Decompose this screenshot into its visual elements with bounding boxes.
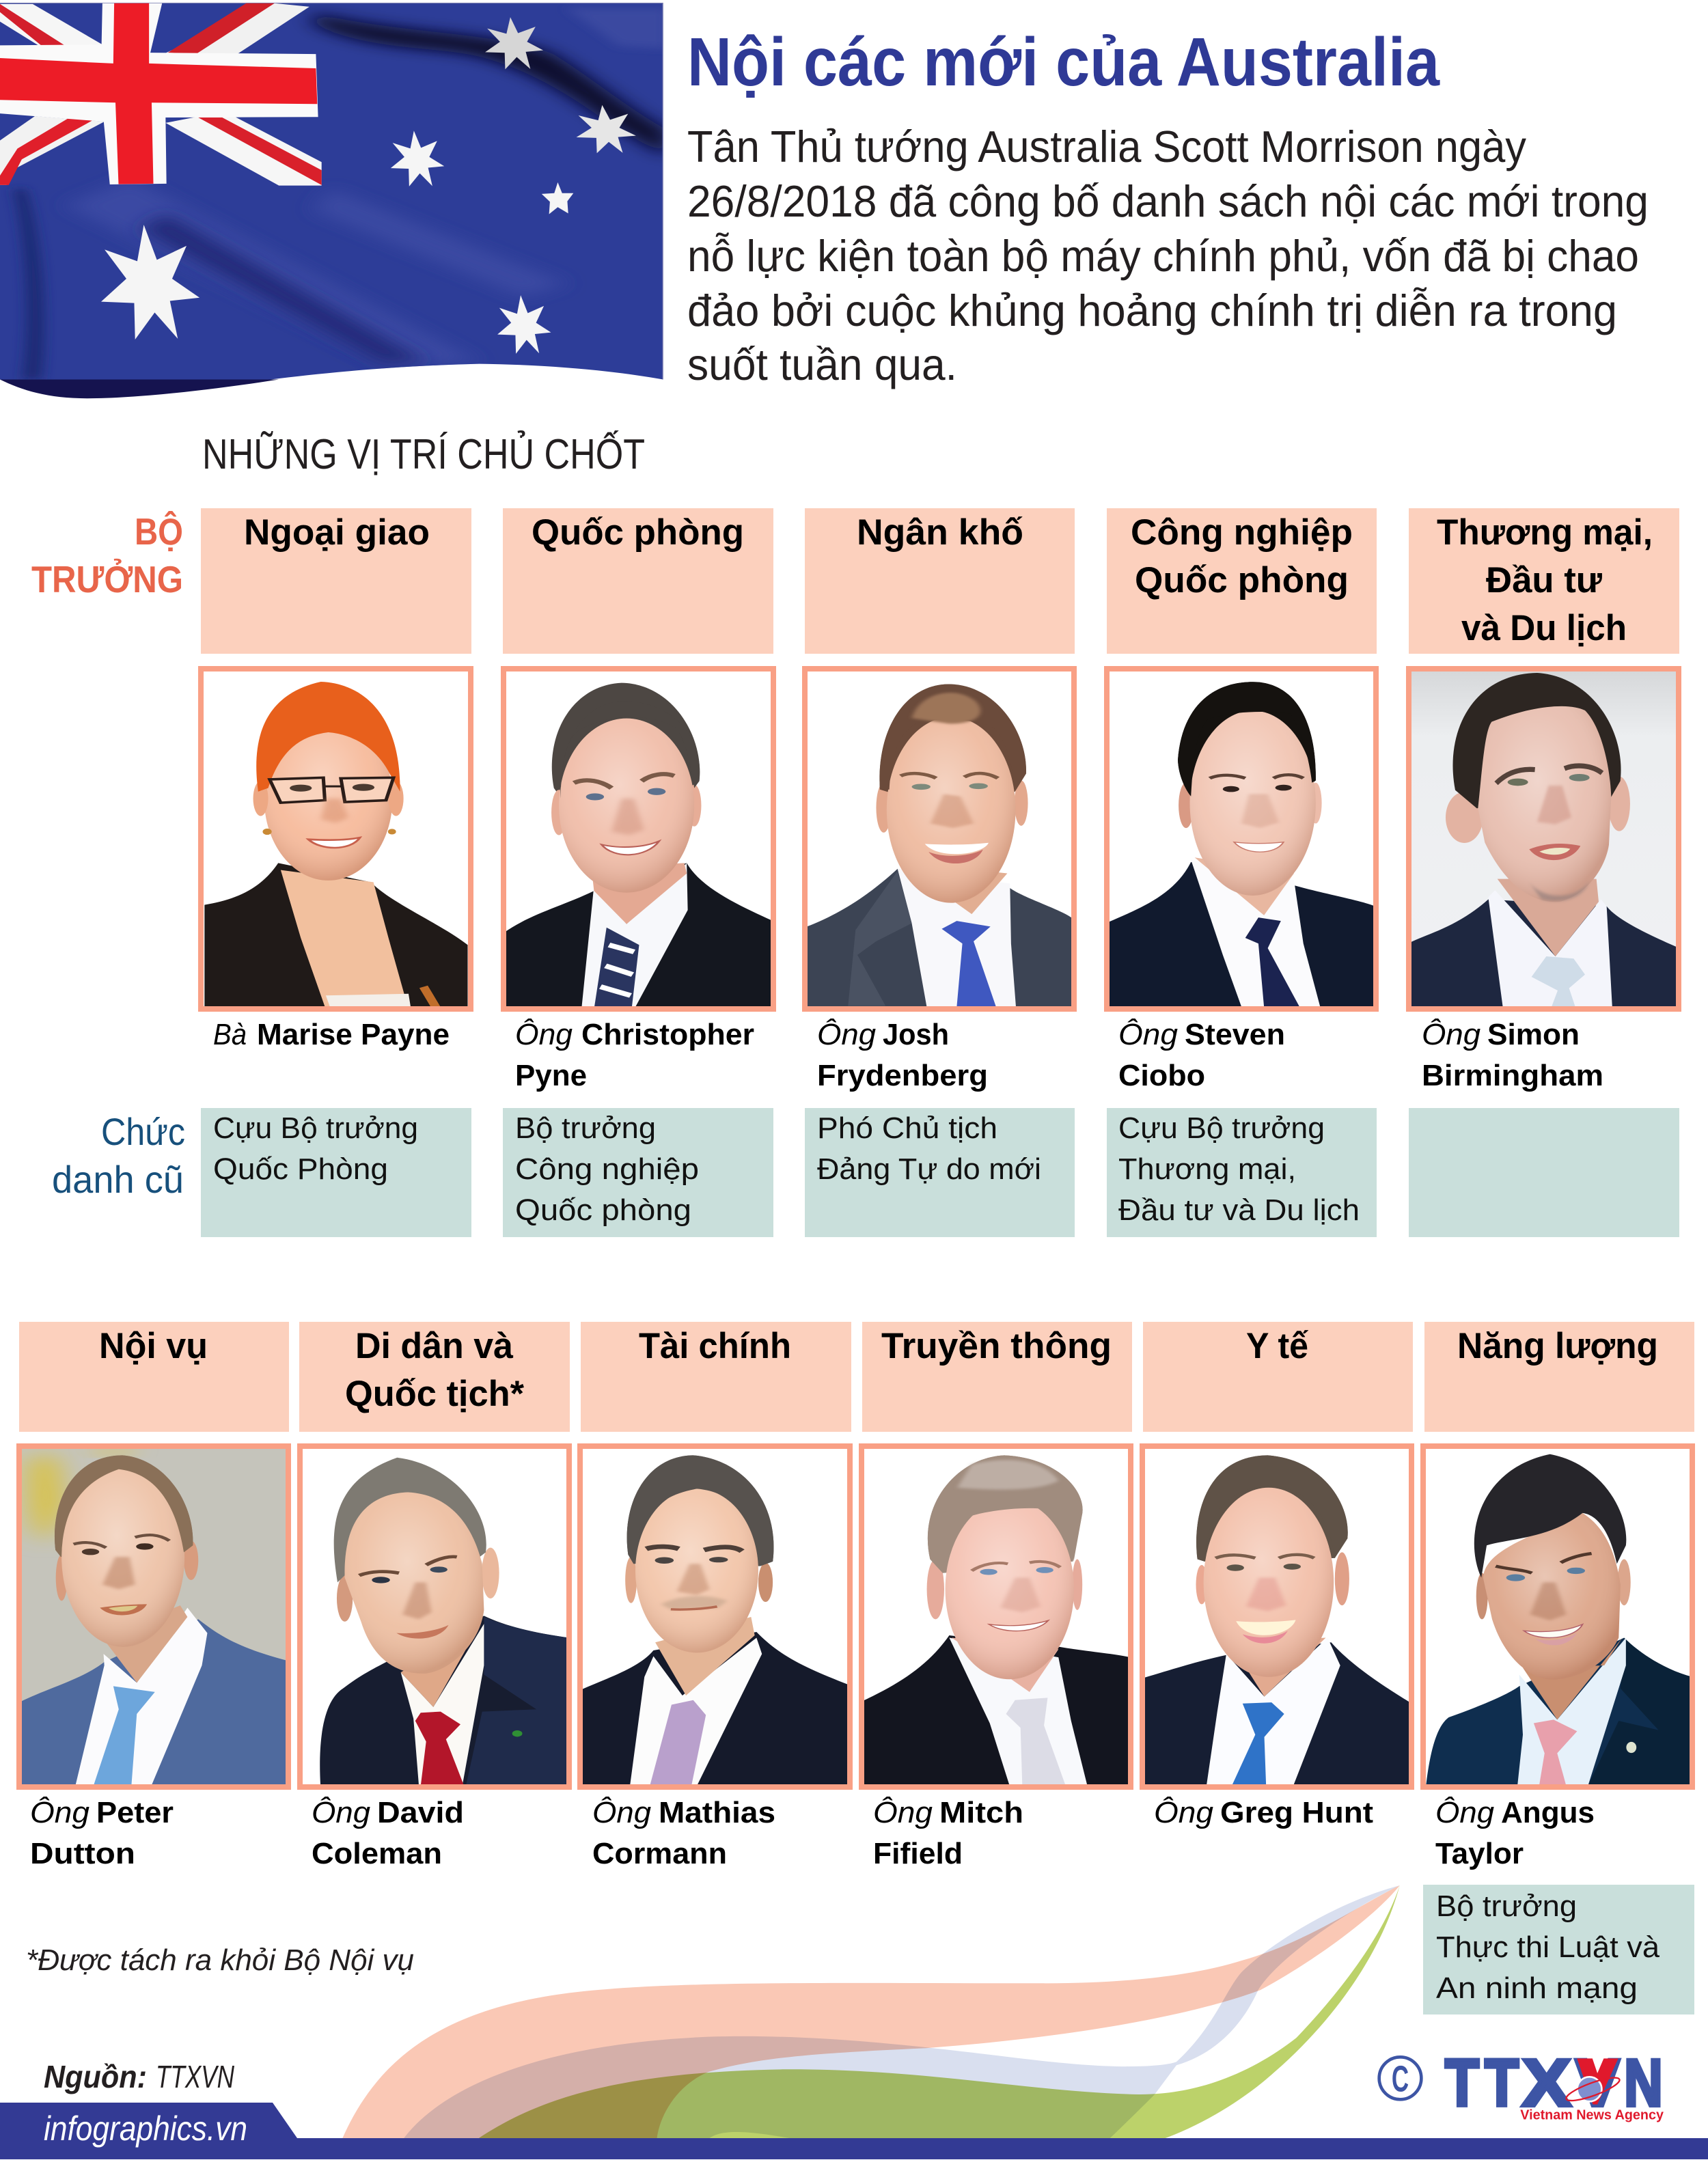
row label: Chức danh cũ: danh cũ <box>52 1158 184 1201</box>
name <box>312 1795 464 1870</box>
copyright mark: C <box>1392 2060 1409 2100</box>
heading <box>805 508 1075 654</box>
former position: Thương mại, <box>1118 1152 1296 1186</box>
former position: Bộ trưởng <box>1436 1889 1577 1923</box>
name: David <box>377 1796 464 1829</box>
name: Angus <box>1501 1796 1595 1829</box>
former position (empty) <box>1409 1108 1679 1237</box>
panel: Truyền thông <box>862 1322 1132 1870</box>
row label: Chức danh cũ: Chức <box>101 1110 185 1153</box>
wordmark: X <box>1522 2045 1571 2120</box>
heading <box>503 508 773 654</box>
frame <box>1423 1446 1692 1787</box>
logo: TTXVN <box>1379 2045 1664 2123</box>
frame <box>580 1446 850 1787</box>
row label: Bộ trưởng: BỘ <box>135 510 183 553</box>
panel: Nội vụ <box>19 1322 289 1870</box>
former position: Cựu Bộ trưởng <box>1118 1111 1325 1145</box>
name: Ông <box>312 1795 371 1829</box>
wordmark: T <box>1485 2045 1519 2120</box>
name: Ông <box>592 1795 652 1829</box>
heading: Công nghiệp <box>1131 512 1353 553</box>
name <box>817 1017 988 1092</box>
row label: Chức danh cũ <box>52 1110 185 1201</box>
decorative swooshes <box>342 1885 1400 2140</box>
name: Greg Hunt <box>1220 1796 1373 1829</box>
name: Coleman <box>312 1837 442 1870</box>
former position <box>1423 1885 1694 2014</box>
name: Josh <box>883 1018 949 1051</box>
frame <box>201 669 471 1009</box>
panel: Ngoại giao <box>201 508 471 1237</box>
heading <box>1424 1322 1694 1432</box>
heading <box>1107 508 1377 654</box>
frame <box>1107 669 1376 1009</box>
union jack <box>0 3 322 186</box>
name: Dutton <box>30 1837 135 1870</box>
name: Ông <box>1154 1795 1214 1829</box>
former position: Quốc phòng <box>515 1193 691 1227</box>
name <box>592 1795 775 1870</box>
name: Ông <box>1435 1795 1495 1829</box>
flag stars <box>101 17 636 354</box>
portrait: David Coleman <box>300 1446 569 1787</box>
panel: Di dân và Quốc tịch <box>299 1322 570 1870</box>
name <box>30 1795 174 1870</box>
heading: Ngân khố <box>857 512 1023 553</box>
name: Ông <box>1422 1017 1481 1051</box>
footer band <box>0 2103 1708 2159</box>
portrait: Marise Payne <box>201 669 471 1010</box>
former position: Đầu tư và Du lịch <box>1118 1193 1360 1227</box>
name <box>873 1795 1023 1870</box>
frame <box>504 669 773 1009</box>
section heading: NHỮNG VỊ TRÍ CHỦ CHỐT <box>202 431 645 478</box>
frame <box>300 1446 569 1787</box>
row label: Bộ trưởng <box>31 510 183 600</box>
name <box>1435 1795 1595 1870</box>
portrait: Steven Ciobo <box>1107 669 1376 1009</box>
name <box>1118 1017 1285 1092</box>
name <box>1154 1795 1373 1829</box>
footnote: *Được tách ra khỏi Bộ Nội vụ <box>26 1943 414 1977</box>
heading: Đầu tư <box>1486 560 1603 600</box>
former position: An ninh mạng <box>1436 1971 1638 2005</box>
wordmark: V <box>1575 2045 1620 2120</box>
flag of Australia <box>0 0 667 398</box>
row label: Bộ trưởng: TRƯỞNG <box>31 558 183 600</box>
panel: Công nghiệp Quốc phòng <box>1107 508 1377 1237</box>
name: Pyne <box>515 1059 587 1092</box>
panel: Quốc phòng <box>503 508 773 1237</box>
heading <box>1143 1322 1413 1432</box>
former position: Công nghiệp <box>515 1152 699 1186</box>
name: Christopher <box>581 1018 754 1051</box>
name: Fifield <box>873 1837 963 1870</box>
name: Marise Payne <box>257 1018 450 1051</box>
intro paragraph <box>687 122 1649 389</box>
heading <box>1409 508 1679 654</box>
name: Cormann <box>592 1837 727 1870</box>
name: Mathias <box>659 1796 775 1829</box>
frame <box>1142 1446 1411 1787</box>
former position <box>805 1108 1075 1237</box>
heading <box>19 1322 289 1432</box>
former position: Quốc Phòng <box>213 1152 388 1186</box>
red V and globe <box>1564 2058 1622 2105</box>
name <box>515 1017 754 1092</box>
heading: Quốc tịch* <box>345 1374 524 1414</box>
name: Peter <box>96 1796 174 1829</box>
heading: Thương mại, <box>1437 512 1653 553</box>
wordmark: N <box>1624 2045 1663 2120</box>
heading: Truyền thông <box>881 1326 1112 1366</box>
heading <box>299 1322 570 1432</box>
name: Taylor <box>1435 1837 1524 1870</box>
panel: Tài chính <box>580 1322 851 1870</box>
frame <box>862 1446 1131 1787</box>
portrait: Christopher Pyne <box>504 669 773 1010</box>
wordmark: T <box>1445 2045 1479 2120</box>
agency name: Vietnam News Agency <box>1520 2108 1664 2123</box>
former position: Bộ trưởng <box>515 1111 656 1145</box>
source credit <box>44 2059 235 2094</box>
heading: Quốc phòng <box>1135 560 1349 600</box>
source credit: TTXVN <box>156 2059 235 2094</box>
panel: Ngân khố <box>805 508 1075 1237</box>
name: Frydenberg <box>817 1059 988 1092</box>
intro paragraph: 26/8/2018 đã công bố danh sách nội các mới trong <box>687 176 1649 226</box>
wordmark <box>1445 2045 1663 2120</box>
name: Ciobo <box>1118 1059 1205 1092</box>
portrait: Angus Taylor <box>1423 1446 1692 1787</box>
portrait: Simon Birmingham <box>1409 669 1679 1009</box>
heading: Ngoại giao <box>244 512 430 553</box>
portrait: Peter Dutton <box>19 1446 288 1787</box>
former position <box>201 1108 471 1237</box>
former position: Đảng Tự do mới <box>817 1152 1041 1186</box>
panel: Thương mại, Đầu tư và Du lịch <box>1409 508 1679 1237</box>
former position: Cựu Bộ trưởng <box>213 1111 418 1145</box>
name: Mitch <box>939 1796 1023 1829</box>
name: Ông <box>873 1795 933 1829</box>
heading: Y tế <box>1246 1326 1308 1366</box>
name: Steven <box>1185 1018 1285 1051</box>
heading: và Du lịch <box>1461 608 1627 648</box>
heading: Tài chính <box>639 1326 791 1366</box>
former position: Phó Chủ tịch <box>817 1111 997 1145</box>
intro paragraph: suốt tuần qua. <box>687 340 957 389</box>
name: Birmingham <box>1422 1059 1603 1092</box>
heading: Năng lượng <box>1457 1326 1658 1366</box>
intro paragraph: đảo bởi cuộc khủng hoảng chính trị diễn ra trong <box>687 286 1617 335</box>
portrait: Mathias Cormann <box>580 1446 850 1787</box>
title: Nội các mới của Australia <box>687 24 1440 100</box>
name: Simon <box>1487 1018 1580 1051</box>
frame <box>805 669 1074 1009</box>
former position <box>503 1108 773 1237</box>
frame <box>19 1446 288 1787</box>
heading: Nội vụ <box>99 1326 208 1366</box>
name: Ông <box>817 1017 877 1051</box>
heading <box>862 1322 1132 1432</box>
panel: Y tế <box>1142 1322 1413 1829</box>
intro paragraph: Tân Thủ tướng Australia Scott Morrison ngày <box>687 122 1526 171</box>
heading: Quốc phòng <box>532 512 744 553</box>
copyright mark <box>1379 2057 1421 2100</box>
intro paragraph: nỗ lực kiện toàn bộ máy chính phủ, vốn đã bị chao <box>687 231 1639 281</box>
portrait: Josh Frydenberg <box>805 669 1074 1009</box>
former position <box>1107 1108 1377 1237</box>
former position: Thực thi Luật và <box>1436 1930 1660 1964</box>
portrait: Mitch Fifield <box>862 1446 1131 1787</box>
heading <box>581 1322 851 1432</box>
heading <box>201 508 471 654</box>
website label: infographics.vn <box>44 2109 247 2148</box>
name <box>1422 1017 1603 1092</box>
panel: Năng lượng <box>1423 1322 1694 2014</box>
frame <box>1409 669 1679 1009</box>
heading: Di dân và <box>355 1326 514 1366</box>
name: Ông <box>1118 1017 1179 1051</box>
name: Bà <box>213 1018 247 1051</box>
name: Ông <box>515 1017 573 1051</box>
portrait: Greg Hunt <box>1142 1446 1412 1787</box>
source credit: Nguồn: <box>44 2059 147 2094</box>
name: Ông <box>30 1795 90 1829</box>
